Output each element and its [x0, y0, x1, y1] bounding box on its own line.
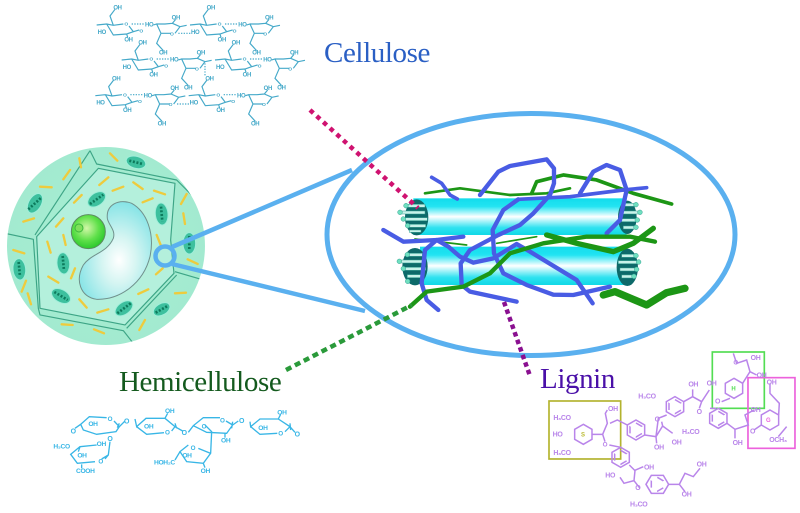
lignin structure: H₃CO — [630, 502, 648, 509]
lignin structure: H₃CO — [553, 450, 572, 457]
cellulose structure: OH — [252, 51, 261, 57]
row 2: O — [149, 57, 153, 63]
row 2: O — [164, 63, 168, 69]
cellulose structure: OH — [290, 50, 298, 56]
cellulose structure: O — [288, 66, 292, 72]
hemicellulose structure: OH — [201, 468, 210, 475]
cellulose structure: O — [258, 63, 262, 69]
hemicellulose structure: OH — [165, 408, 175, 415]
row 3: OH — [170, 86, 179, 92]
cellulose structure: O — [231, 99, 235, 105]
cellulose structure — [95, 6, 305, 127]
H unit box — [712, 352, 764, 408]
hemicellulose structure: O — [124, 418, 130, 425]
lignin structure: HO — [553, 432, 563, 439]
chloroplasts — [12, 154, 196, 319]
chloroplast grana — [19, 161, 189, 313]
hemicellulose structure: H₃CO — [53, 444, 70, 451]
cellulose structure: HO — [216, 65, 225, 71]
row 1: HO — [145, 23, 154, 29]
row 2: OH — [197, 50, 205, 56]
hemicellulose structure: O — [165, 429, 170, 436]
zoom connector lines and lens — [156, 170, 365, 311]
row 2: OH — [184, 86, 192, 92]
S unit box — [549, 401, 621, 459]
hemicellulose structure: HOH₂C — [154, 459, 175, 466]
icon: plant cell cross-section — [5, 147, 205, 345]
lignin structure: H₃CO — [638, 394, 657, 401]
lignin structure: OH — [644, 464, 654, 471]
cellulose structure: HO — [237, 93, 246, 99]
cellulose structure: O — [233, 28, 237, 34]
lignin structure: OH — [751, 407, 761, 414]
lignin structure: OH — [608, 406, 618, 413]
hemicellulose strands — [415, 175, 672, 245]
lignin structure: HO — [605, 473, 616, 480]
lignin structure: O — [635, 485, 641, 492]
magnified ellipse — [327, 114, 735, 356]
hemicellulose structure: O — [98, 458, 103, 465]
hemicellulose structure: O — [220, 418, 225, 425]
dotted leader: hemicellulose — [286, 305, 412, 370]
hemicellulose structure: O — [202, 423, 207, 430]
fibre end caps — [397, 199, 642, 286]
lignin structure: H₃CO — [682, 429, 700, 436]
hemicellulose structure: O — [295, 431, 301, 438]
cellulose structure: OH — [216, 108, 225, 114]
dotted leader: cellulose — [310, 110, 418, 208]
label: Cellulose: Cellulose — [324, 37, 430, 69]
row 2 — [122, 41, 212, 92]
row 1: O — [139, 28, 143, 34]
lignin structure: O — [603, 442, 608, 449]
cellulose structure: O — [216, 92, 220, 98]
lignin structure: OH — [757, 372, 767, 379]
lignin structure: OH — [697, 462, 707, 469]
row 1: O — [170, 31, 174, 37]
lignin structure: OH — [733, 440, 743, 447]
lignin structure: G — [766, 418, 771, 424]
row 2: HO — [170, 58, 179, 64]
lignin rings and bonds — [575, 353, 787, 493]
cellulose structure: OH — [243, 72, 251, 78]
hemicellulose structure: OH — [182, 452, 192, 459]
hemicellulose structure: OH — [221, 438, 231, 445]
row 3: HO — [144, 93, 153, 99]
hemicellulose structure — [53, 408, 301, 475]
cellulose structure: HO — [238, 23, 247, 29]
nucleus — [71, 215, 105, 249]
cellulose cylinders — [413, 198, 627, 285]
row 3: OH — [112, 76, 120, 82]
hemicellulose structure: OH — [144, 423, 154, 430]
hemicellulose structure: O — [191, 445, 196, 452]
row 3: OH — [123, 108, 131, 114]
lignin structure: OH — [682, 492, 692, 499]
row 2: HO — [123, 65, 132, 71]
hemicellulose structure: O — [182, 430, 188, 437]
row 3: O — [123, 92, 127, 98]
lignin structure: H₃CO — [553, 415, 572, 422]
yellow organelles — [13, 153, 198, 333]
row 3: O — [169, 102, 173, 108]
cellulose structure: O — [263, 31, 267, 37]
row 1: O — [124, 22, 128, 28]
lignin structure: OCH₃ — [769, 437, 787, 444]
label: Hemicellulose: Hemicellulose — [119, 366, 281, 398]
row 1: OH — [159, 51, 167, 57]
hemicellulose structure: OH — [97, 441, 107, 448]
lignin structure: OH — [654, 444, 664, 451]
lignin structure: OH — [688, 382, 698, 389]
row 1: OH — [172, 15, 180, 21]
hemicellulose structure: COOH — [76, 468, 95, 475]
hemicellulose structure: O — [239, 418, 245, 425]
cellulose structure: OH — [207, 6, 215, 12]
cellulose structure: HO — [263, 58, 272, 64]
hemicellulose structure: O — [278, 431, 283, 438]
cellulose structure: OH — [218, 37, 226, 43]
lignin structure: S — [581, 433, 585, 439]
cellulose structure: OH — [205, 76, 214, 82]
cellulose structure: O — [218, 22, 222, 28]
row 1: HO — [98, 30, 107, 36]
hemicellulose structure: OH — [277, 409, 287, 416]
row 2: OH — [138, 41, 147, 47]
lignin structure: O — [655, 417, 661, 424]
row 1: OH — [124, 37, 133, 43]
lignin strands — [383, 159, 647, 310]
row 3: HO — [96, 101, 105, 107]
vacuole — [79, 202, 151, 299]
cellulose structure: OH — [251, 121, 259, 127]
row 2: O — [195, 66, 199, 72]
lignin structure: H — [731, 387, 735, 393]
cell walls — [5, 151, 203, 343]
row 1: OH — [113, 6, 122, 12]
row 3: OH — [158, 121, 166, 127]
lignin structure: OH — [767, 380, 777, 387]
cellulose structure: O — [243, 57, 247, 63]
lignin structure: O — [715, 398, 721, 405]
hemicellulose structure: OH — [77, 452, 87, 459]
cellulose structure: O — [262, 102, 266, 108]
cellulose structure: OH — [232, 41, 240, 47]
G unit box — [748, 378, 795, 448]
cellulose structure: OH — [264, 86, 272, 92]
lignin structure: OH — [672, 439, 682, 446]
lignin structure: O — [697, 409, 703, 416]
hemicellulose structure: O — [71, 428, 77, 435]
microfibril bundle — [383, 159, 685, 310]
cellulose structure: OH — [277, 86, 286, 92]
row 2: OH — [149, 72, 158, 78]
cellulose structure: OH — [265, 15, 273, 21]
dotted leader: lignin — [504, 302, 530, 376]
lignin structure: OH — [707, 380, 717, 387]
row 1 — [97, 6, 191, 57]
lignin structure: OH — [751, 355, 761, 362]
lignin structure — [549, 352, 795, 509]
hemicellulose strands front — [410, 228, 685, 307]
lignin structure: O — [733, 360, 738, 367]
hemicellulose structure: OH — [88, 421, 98, 428]
label: Lignin: Lignin — [540, 363, 616, 395]
row 3 — [95, 76, 190, 127]
row 3: O — [138, 99, 142, 105]
hemicellulose structure: O — [108, 416, 113, 423]
hemicellulose structure: OH — [258, 425, 268, 432]
hemicellulose structure: O — [107, 436, 113, 443]
lignin structure: O — [750, 428, 756, 435]
cellulose structure: HO — [191, 30, 200, 36]
cellulose structure: HO — [190, 101, 199, 107]
